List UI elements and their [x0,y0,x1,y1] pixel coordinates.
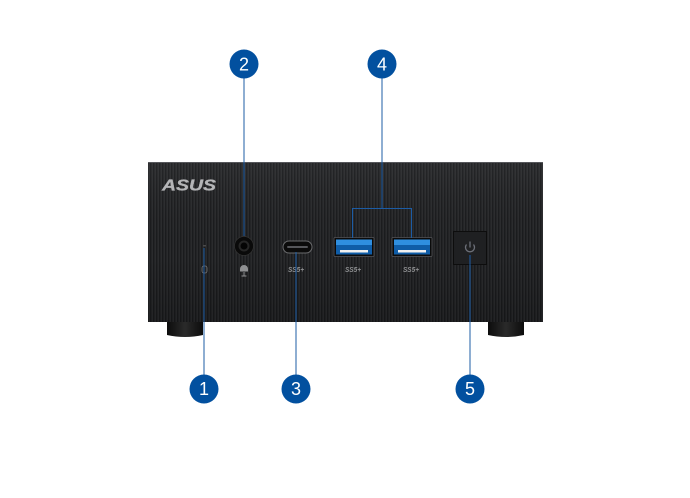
callout 5 [456,255,484,404]
USB-A port 1 [334,238,374,274]
callout 3 [282,252,310,404]
callout 2 [230,50,258,236]
foot: left [167,322,203,337]
callout 2: 2 [239,54,249,74]
power button [454,232,486,264]
callout 1: 1 [199,379,209,399]
USB-C port: SS5+ [288,267,304,274]
device body [148,162,543,322]
callout 1 [190,248,218,404]
callout 4: 4 [377,54,387,74]
callout 5: 5 [465,379,475,399]
USB-A port 2 [392,238,432,274]
USB-C port [283,241,312,274]
USB-A port 1: SS5+ [345,267,361,274]
ASUS logo: ASUS [161,178,216,194]
callout 3: 3 [291,379,301,399]
USB-A port 2: SS5+ [403,267,419,274]
LED indicator [202,245,207,273]
audio jack [234,236,254,276]
callout 4 [352,50,412,238]
foot: right [488,322,524,337]
